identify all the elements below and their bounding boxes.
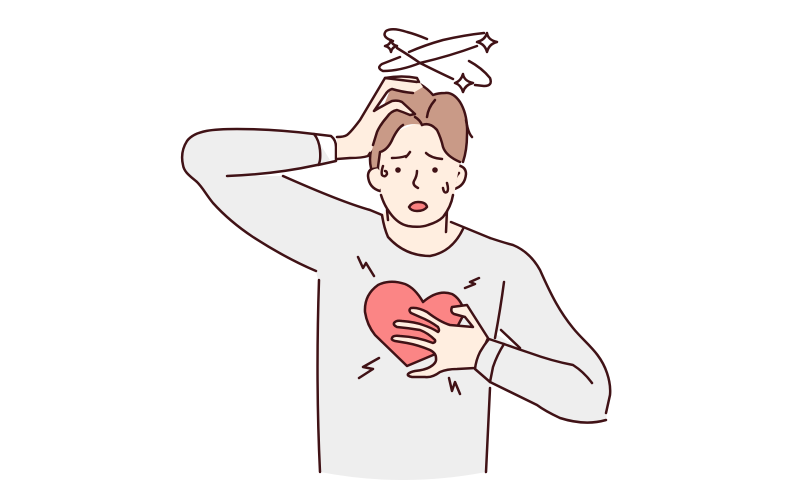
neck and collar bbox=[381, 195, 490, 256]
nose bbox=[414, 171, 418, 188]
sweat drops bbox=[382, 166, 448, 192]
hair bbox=[370, 83, 472, 168]
raised hand on head bbox=[337, 76, 423, 159]
hand on heart bbox=[392, 305, 488, 377]
right sleeve bbox=[475, 238, 610, 423]
ears bbox=[368, 165, 466, 191]
head bbox=[368, 83, 472, 227]
face bbox=[378, 122, 460, 226]
sweater body bbox=[182, 129, 610, 480]
mouth bbox=[409, 202, 427, 211]
eyes bbox=[395, 167, 438, 173]
dizzy swirl lines bbox=[379, 29, 491, 86]
chest pain bolts bbox=[358, 257, 479, 394]
eyebrows bbox=[392, 152, 442, 159]
sparkle stars bbox=[385, 33, 497, 92]
heart bbox=[365, 282, 465, 366]
raised left sleeve bbox=[182, 129, 336, 271]
